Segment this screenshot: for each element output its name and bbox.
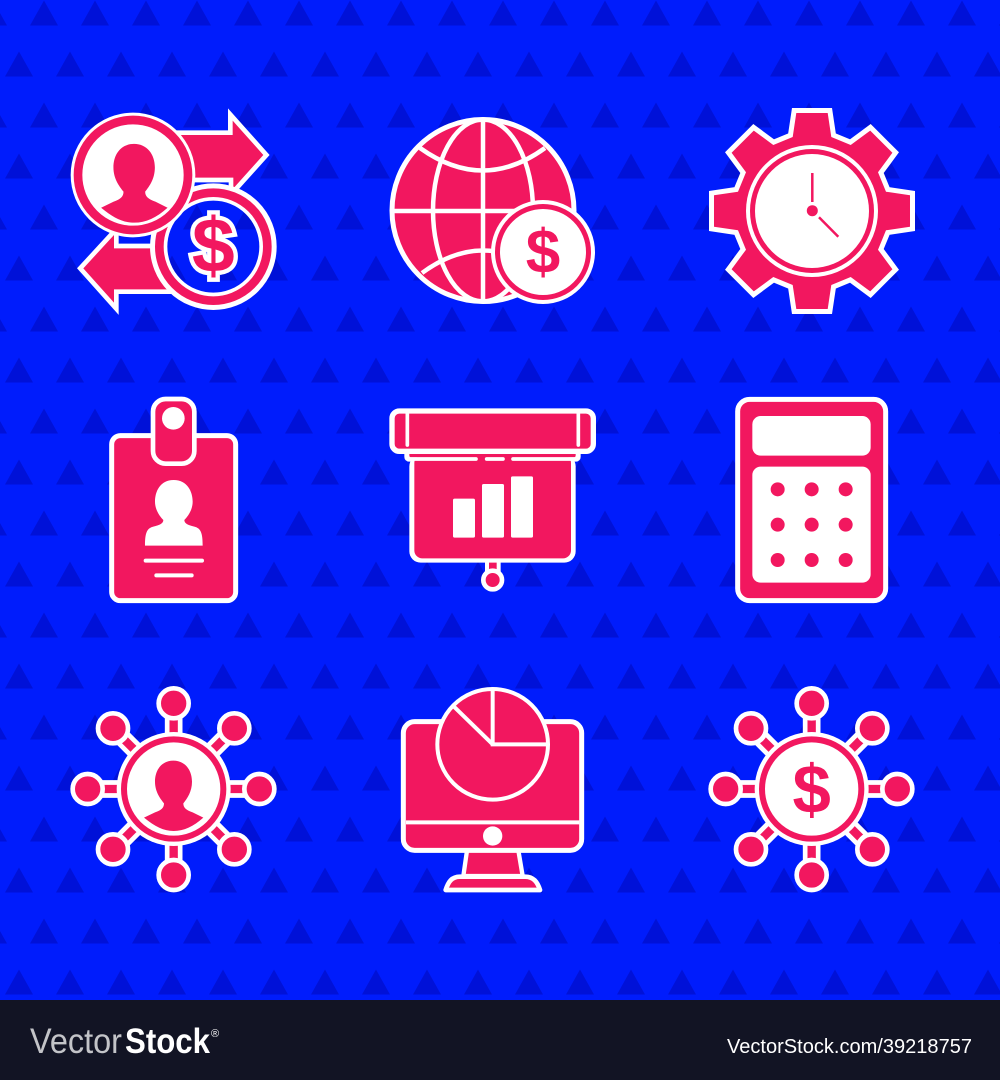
network links (93, 708, 254, 870)
dollar coin: $ (192, 203, 235, 289)
calculator body (738, 399, 886, 601)
board with strip and dashes (404, 448, 581, 563)
icon: gear with clock (714, 113, 910, 309)
dollar coin: $ (526, 218, 560, 287)
logo: VectorStock: ® (211, 1028, 219, 1040)
icon: globe with dollar coin (392, 118, 595, 304)
icon: people network (73, 688, 274, 890)
network nodes (711, 688, 912, 890)
display (752, 416, 871, 456)
dollar coin (159, 192, 268, 301)
monitor stand (446, 848, 540, 890)
dollar coin (491, 200, 595, 304)
network links (731, 708, 892, 870)
central dollar: $ (792, 751, 831, 828)
icon: calculator (738, 399, 886, 601)
central dollar (755, 732, 869, 846)
logo: VectorStock: Stock (125, 1022, 210, 1061)
text lines (146, 561, 202, 575)
arrow: left (83, 235, 172, 303)
icon: ID badge (112, 399, 236, 601)
badge clip (153, 399, 194, 464)
central person (117, 732, 231, 846)
pull handle (483, 558, 502, 589)
clock face (746, 145, 878, 277)
image reference: VectorStock.com/39218757 (727, 1036, 972, 1058)
arrow: right (180, 121, 263, 188)
logo: VectorStock: Vector (30, 1022, 122, 1061)
gear (714, 113, 910, 309)
icon: presentation board with bar chart (392, 411, 593, 589)
icon: person and dollar exchange arrows (71, 113, 268, 303)
person silhouette (145, 480, 203, 546)
person avatar (71, 113, 195, 237)
footer bar (0, 1000, 1000, 1080)
network nodes (73, 688, 274, 890)
logo: VectorStock (30, 1022, 219, 1061)
icon: monitor with pie chart (403, 689, 582, 890)
monitor screen (403, 722, 582, 850)
pie chart (437, 689, 548, 800)
icon: dollar network (711, 688, 912, 890)
roller (392, 411, 593, 451)
keypad (752, 467, 871, 583)
bar chart (453, 476, 533, 538)
globe (392, 118, 574, 303)
badge card (112, 436, 236, 601)
